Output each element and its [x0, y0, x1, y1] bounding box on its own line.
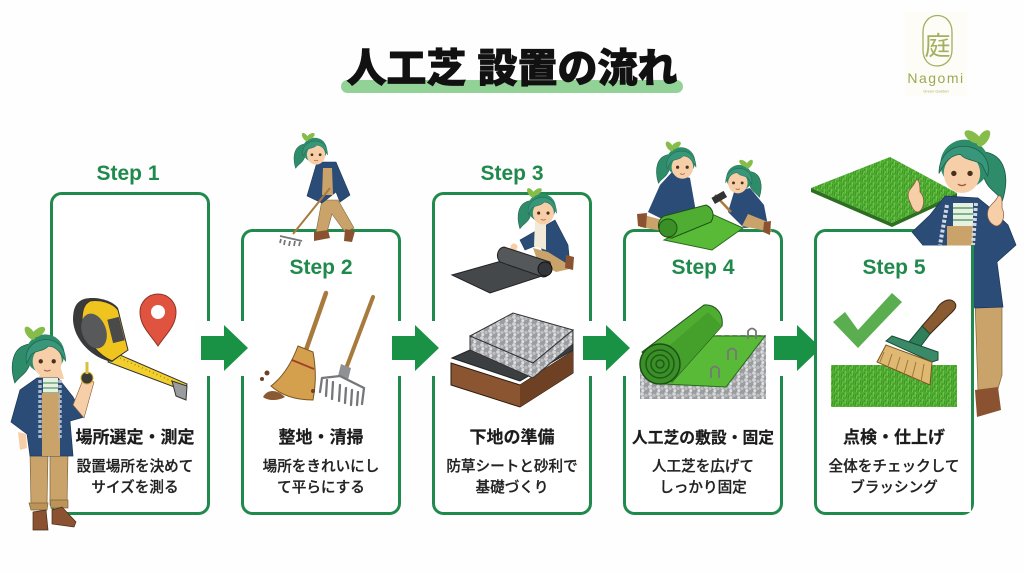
- description: step 3: 基礎づくり: [476, 479, 548, 496]
- white mask over character: [905, 246, 971, 512]
- description: step 3: 防草シートと砂利で: [446, 458, 578, 475]
- logo: Nagomi Green Garden: [905, 12, 967, 96]
- logo: Nagomi Green Garden: 庭: [924, 31, 951, 61]
- character: step 2 raking: [280, 132, 355, 246]
- step 2 label: Step 2: [289, 256, 353, 279]
- icon: rake: [320, 297, 373, 405]
- heading: step 1: 場所選定・測定: [76, 428, 194, 447]
- icon: brush: [877, 300, 956, 385]
- description: step 5: [829, 458, 959, 496]
- heading: step 4: 人工芝の敷設・固定: [632, 428, 774, 447]
- logo: Nagomi Green Garden: Green Garden: [923, 88, 949, 94]
- heading: step 5: 点検・仕上げ: [843, 428, 945, 447]
- description: step 2: 場所をきれいにし: [263, 458, 379, 475]
- icon: weed sheet roll: [452, 247, 552, 293]
- description: step 3: [446, 458, 578, 496]
- arrow: step 1 to 2: [196, 321, 248, 376]
- character: step 1 with tape: [11, 325, 94, 530]
- icon: tape measure: [73, 298, 187, 400]
- panel: step 4: [624, 140, 782, 513]
- character: thumbs up: [908, 128, 1016, 417]
- step 5 label: Step 5: [862, 256, 926, 279]
- description: step 4: しっかり固定: [659, 479, 747, 496]
- description: step 1: サイズを測る: [91, 478, 179, 496]
- panel: step 1: [52, 162, 208, 514]
- description: step 2: て平らにする: [277, 479, 365, 496]
- icon: check mark: [833, 293, 902, 348]
- icon: map pin: [140, 294, 176, 346]
- arrow: step 3 to 4: [578, 321, 630, 376]
- arrow: step 2 to 3: [388, 321, 439, 376]
- description: step 5: ブラッシング: [850, 478, 938, 496]
- heading: step 3: 下地の準備: [470, 427, 554, 447]
- panel: step 5: [816, 128, 1016, 514]
- character: rolling sheet: [510, 187, 574, 272]
- icon: broom: [260, 293, 326, 400]
- arrow: step 4 to 5: [770, 321, 821, 376]
- description: step 1: 設置場所を決めて: [77, 458, 193, 475]
- step 3 label: Step 3: [480, 162, 544, 185]
- logo: Nagomi Green Garden: Nagomi: [907, 70, 965, 86]
- icon: ground layers: [451, 313, 573, 407]
- panel: step 2: [242, 230, 400, 514]
- panel: step 3: [434, 162, 590, 514]
- icon: grass patch: [831, 365, 957, 407]
- description: step 1: [77, 458, 193, 496]
- title: 人工芝 設置の流れ: [346, 47, 678, 91]
- description: step 4: [652, 458, 754, 496]
- icon: grass tile: [811, 157, 957, 227]
- icon: turf roll with pins: [640, 305, 766, 399]
- description: step 2: [263, 458, 379, 496]
- description: step 4: 人工芝を広げて: [652, 458, 754, 475]
- description: step 5: 全体をチェックして: [829, 458, 959, 475]
- step 1 label: Step 1: [96, 162, 160, 185]
- characters: laying turf: [637, 140, 772, 250]
- heading: step 2: 整地・清掃: [278, 428, 364, 447]
- step 4 label: Step 4: [671, 256, 735, 279]
